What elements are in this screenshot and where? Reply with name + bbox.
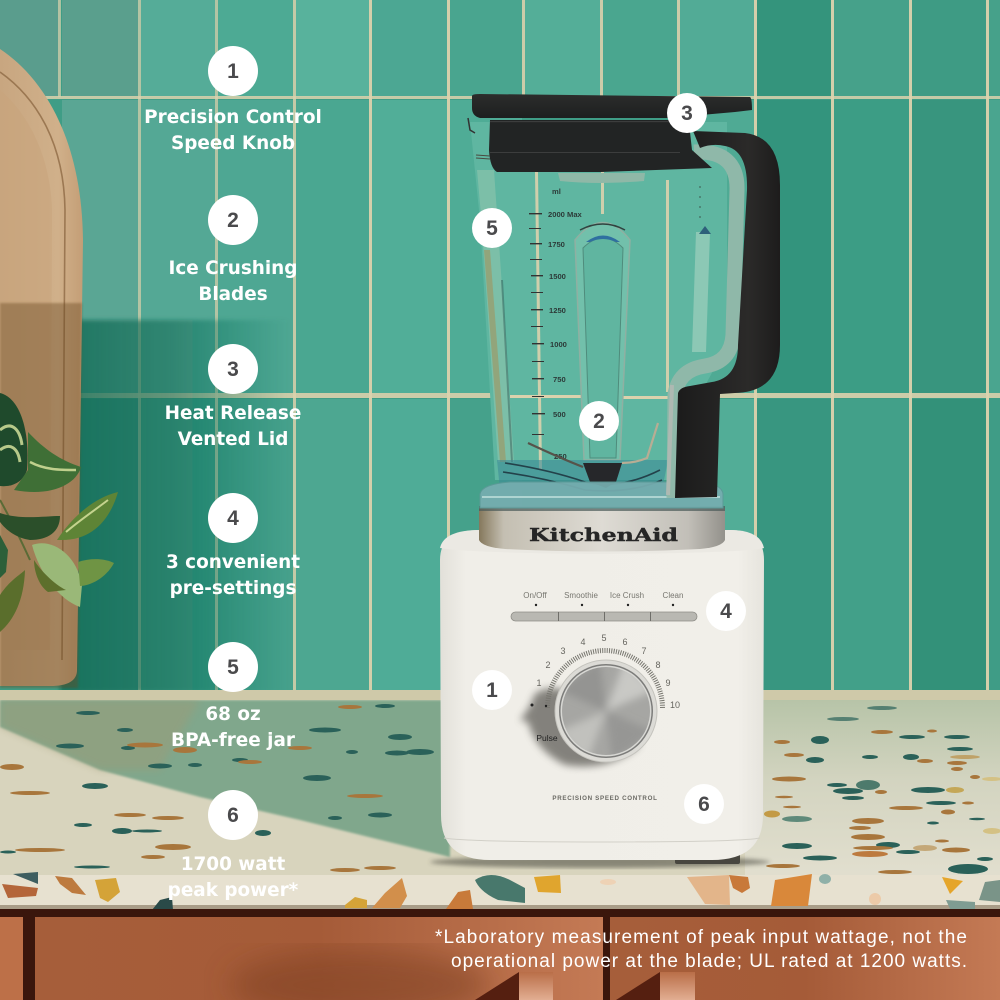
leaf (57, 492, 118, 540)
speed dial scale: 6 (622, 637, 628, 647)
marker 5: 5 (486, 217, 498, 240)
knob shadow (520, 688, 640, 766)
flecks amber and brown (0, 705, 1000, 874)
footnote (435, 927, 967, 972)
speed dial scale: 7 (641, 646, 647, 656)
marker 2 (579, 401, 619, 441)
jar measurement scale: 1250 (549, 306, 566, 315)
control labels: Ice Crush (610, 591, 644, 600)
feature 1 (144, 46, 322, 154)
feature 6: peak power* (168, 880, 299, 901)
leaf (32, 543, 82, 607)
cabinet fronts (0, 909, 1000, 1000)
jar measurement scale: 2000 Max (548, 210, 583, 219)
jar measurement scale (529, 187, 583, 461)
jar bottom (497, 460, 668, 490)
leaf (0, 513, 60, 540)
feature 2: Ice Crushing (169, 258, 297, 279)
speed dial scale: 10 (670, 700, 680, 710)
marker 4: 4 (720, 600, 732, 623)
clear handle band (674, 152, 737, 498)
jar measurement scale: 750 (553, 375, 566, 384)
flecks dark teal (0, 704, 993, 874)
feature 4: pre-settings (170, 578, 296, 599)
feature 3 (165, 344, 301, 450)
motor base: Pulse (536, 733, 558, 743)
cutting board (0, 49, 83, 688)
control labels: Clean (663, 591, 683, 600)
leaf (14, 432, 81, 492)
jar measurement scale: 1750 (548, 240, 565, 249)
speed dial scale: 2 (545, 660, 551, 670)
marker 2: 2 (593, 410, 605, 433)
speed knob (555, 660, 657, 762)
lid (468, 94, 752, 183)
plant (0, 393, 118, 632)
drive collar (479, 508, 725, 552)
feature 3: Heat Release (165, 403, 301, 424)
inner spout strip (692, 232, 710, 352)
preset button bar (511, 612, 697, 621)
leaf (78, 559, 114, 586)
blender (430, 94, 780, 868)
feature 2: Blades (198, 284, 268, 305)
marker 5 (472, 208, 512, 248)
feature 4: 3 convenient (166, 552, 300, 573)
leaf (0, 393, 28, 486)
leaf (0, 570, 25, 632)
feature 1: Speed Knob (171, 133, 295, 154)
jar measurement scale: 1000 (550, 340, 567, 349)
speed dial scale: 5 (601, 633, 607, 643)
handle (675, 131, 780, 498)
grout seen through jar (510, 172, 670, 470)
blades (528, 423, 658, 467)
jar measurement scale: ml (552, 187, 561, 196)
terrazzo countertop (0, 690, 1000, 910)
hotspot markers on blender (472, 93, 746, 824)
blender shadow on counter (430, 856, 770, 868)
feature list (144, 46, 322, 901)
feature 4 (166, 493, 300, 599)
feature 1: Precision Control (144, 107, 322, 128)
feature 4: 4 (227, 507, 239, 530)
speed dial scale: 8 (655, 660, 661, 670)
cabinet handle left (475, 972, 553, 1000)
feature 5 (171, 642, 296, 751)
feature 5: BPA-free jar (171, 730, 296, 751)
KitchenAid logo: KitchenAid (529, 525, 679, 546)
marker 1: 1 (486, 679, 498, 702)
feature 6 (168, 790, 299, 901)
control labels: On/Off (523, 591, 547, 600)
large front-edge chips (2, 884, 38, 898)
jar measurement scale: 1500 (549, 272, 566, 281)
wall shadow (60, 320, 290, 692)
feature 3: 3 (227, 358, 239, 381)
control labels: Smoothie (564, 591, 598, 600)
footnote: operational power at the blade; UL rated at 1200 watts. (451, 951, 967, 972)
marker 3: 3 (681, 102, 693, 125)
feature 6: 1700 watt (181, 854, 285, 875)
jar (468, 94, 780, 508)
motor base: PRECISION SPEED CONTROL (552, 795, 658, 802)
jar flange (480, 482, 723, 508)
footnote: *Laboratory measurement of peak input wattage, not the (435, 927, 967, 948)
marker 6 (684, 784, 724, 824)
speed dial scale: 9 (665, 678, 671, 688)
tiled wall background (0, 0, 1000, 700)
motor base (440, 506, 764, 864)
feature 1: 1 (227, 60, 239, 83)
front edge of counter (0, 875, 1000, 909)
feature 5: 5 (227, 656, 239, 679)
jar measurement scale: 500 (553, 410, 566, 419)
speed dial scale (530, 633, 680, 710)
marker 6: 6 (698, 793, 710, 816)
cabinet handle right (616, 972, 695, 1000)
marker 3 (667, 93, 707, 133)
control labels (523, 591, 683, 606)
jar left wall (477, 170, 514, 462)
feature 5: 68 oz (205, 704, 261, 725)
marker 4 (706, 591, 746, 631)
speed dial scale: 4 (580, 637, 586, 647)
marker 1 (472, 670, 512, 710)
centre column (575, 222, 630, 460)
grout lines (0, 0, 1000, 690)
jar measurement scale: 250 (554, 452, 567, 461)
speed dial scale: 1 (536, 678, 542, 688)
feature 2 (169, 195, 297, 305)
feature 2: 2 (227, 209, 239, 232)
speed dial scale: 3 (560, 646, 566, 656)
feature 3: Vented Lid (178, 429, 288, 450)
feature 6: 6 (227, 804, 239, 827)
